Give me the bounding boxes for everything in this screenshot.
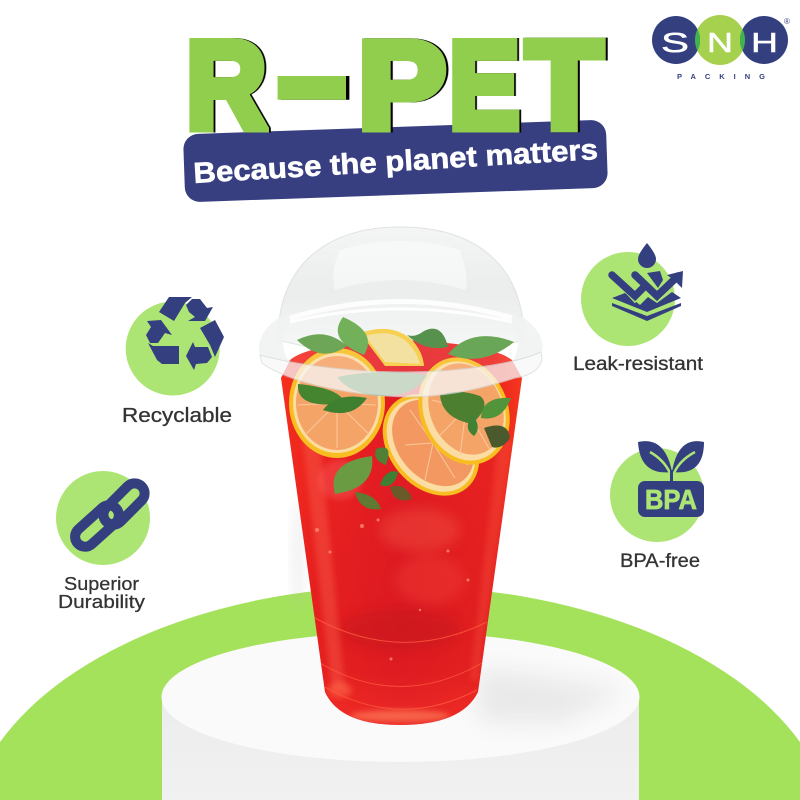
banner text: Because the planet matters (193, 134, 599, 190)
lid rim (259, 301, 543, 397)
rim outline (259, 301, 542, 397)
back lemon slice (360, 329, 424, 366)
title (186, 8, 608, 154)
ice and highlights (300, 420, 512, 722)
title: - (277, 8, 347, 146)
label: Superior (64, 574, 139, 594)
title: T (526, 16, 602, 154)
icon: layers with drop and arrows (612, 243, 683, 321)
logo tagline: PACKING (677, 72, 765, 81)
logo letters: N (707, 27, 733, 58)
icon: chain (71, 479, 149, 551)
cup shadow (293, 500, 303, 610)
rim left crescent (259, 317, 290, 362)
registered mark: ® (784, 17, 790, 26)
title: P (358, 16, 446, 154)
bubbles (315, 518, 470, 660)
title: E (449, 16, 520, 154)
feature: recyclable (122, 297, 232, 427)
label: Durability (58, 592, 145, 612)
icon: BPA leaf badge: BPA (645, 484, 697, 515)
lemon slice left (289, 348, 385, 458)
label: Leak-resistant (573, 354, 704, 375)
rim front band (260, 352, 542, 397)
drink cup (259, 227, 543, 725)
mint leaves (297, 317, 514, 509)
label: BPA-free (620, 550, 700, 572)
logo letters (661, 27, 778, 58)
dome lid (278, 227, 524, 356)
banner (183, 120, 608, 202)
feature: leak-resistant (573, 243, 704, 375)
lemon slice right (403, 344, 525, 478)
red liquid (281, 340, 522, 725)
title: R (186, 16, 266, 154)
white pedestal (162, 632, 640, 800)
lemon slice center (363, 375, 499, 515)
logo letters: H (751, 27, 778, 58)
label (58, 574, 145, 612)
rim right crescent (512, 317, 543, 362)
logo (652, 15, 790, 81)
feature: superior durability (56, 471, 150, 612)
feature: bpa-free (610, 441, 704, 572)
logo letters: S (661, 27, 689, 58)
cup ridges (313, 617, 487, 709)
icon: recycle arrows (146, 297, 224, 370)
green background arc (0, 586, 800, 800)
label: Recyclable (122, 405, 232, 427)
